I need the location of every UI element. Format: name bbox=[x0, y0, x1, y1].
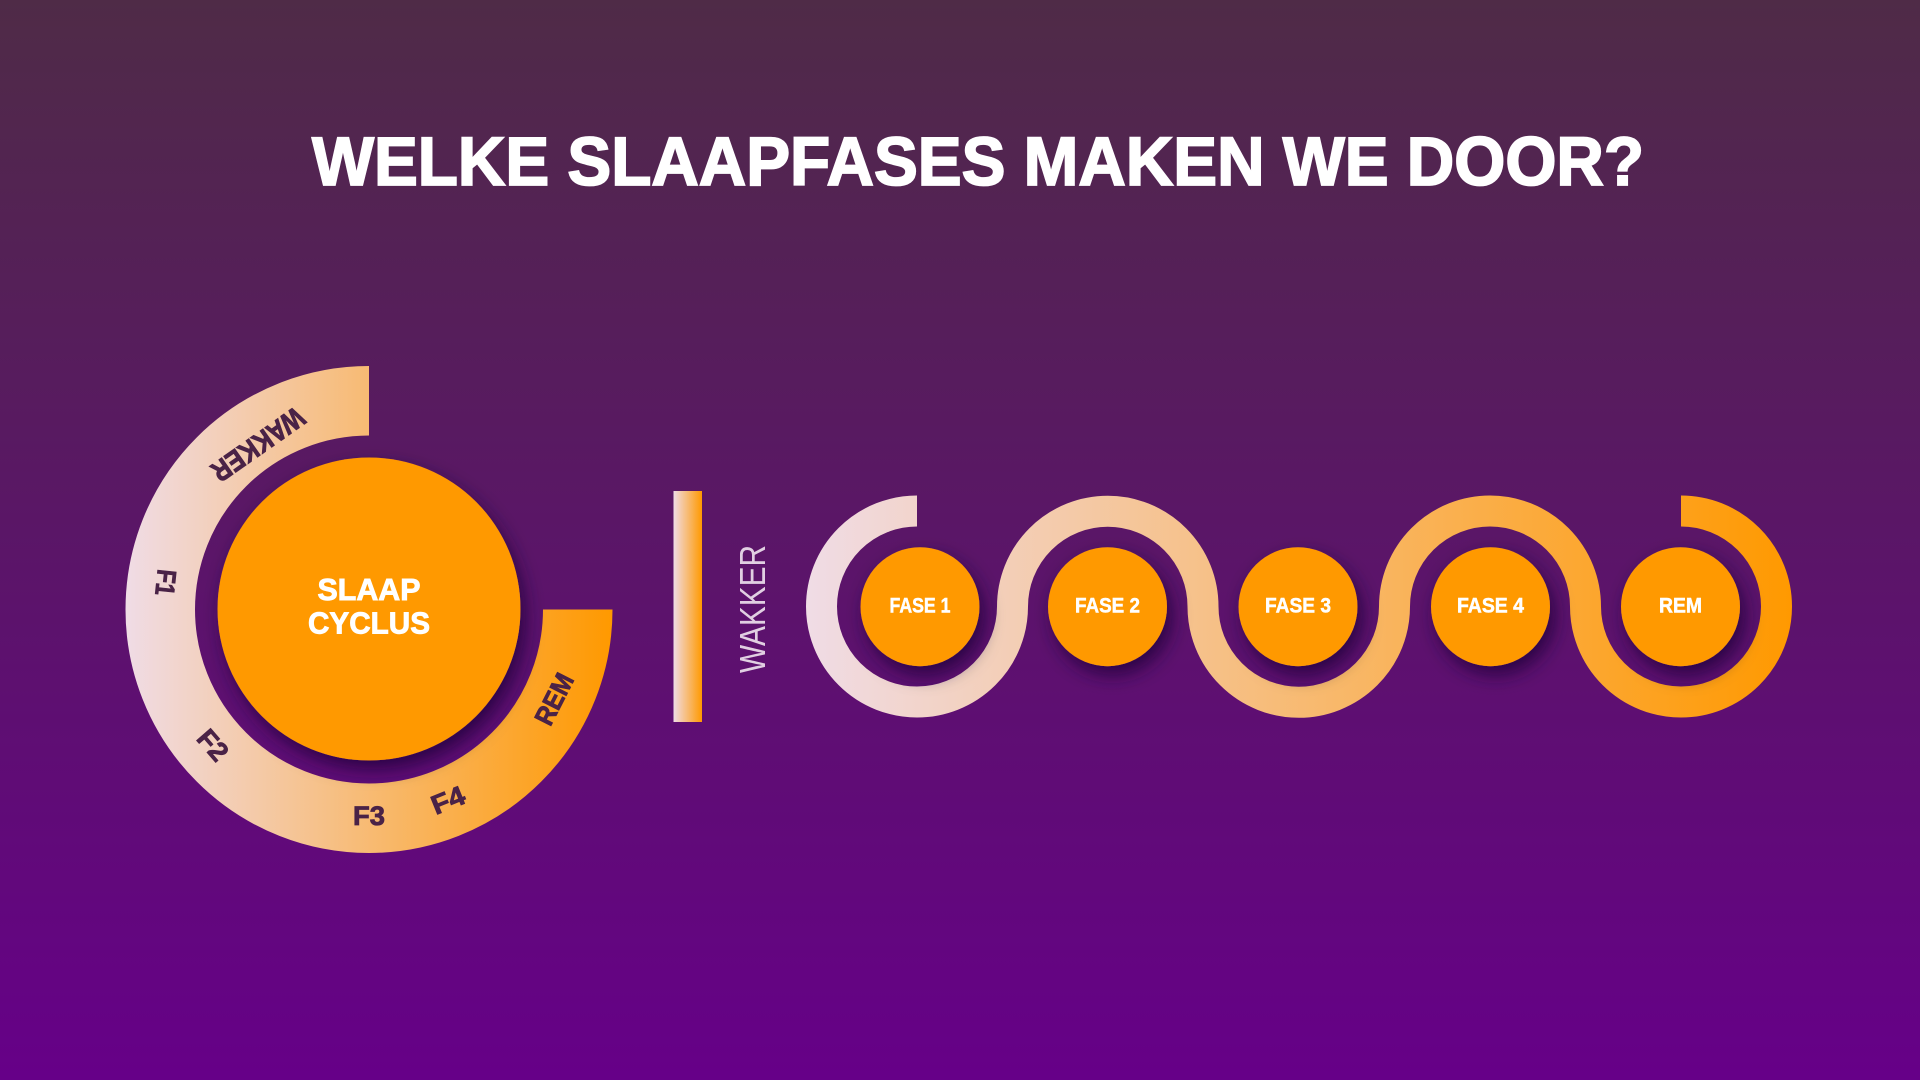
center circle: slaap cyclus bbox=[218, 458, 520, 760]
label: wakker on ring: WAKKER bbox=[205, 400, 310, 487]
phase: fase 1 bbox=[860, 547, 980, 666]
vertical label: wakker: WAKKER bbox=[732, 545, 773, 673]
phase: fase 3 bbox=[1238, 547, 1358, 666]
phase: fase 1: FASE 1 bbox=[890, 594, 951, 618]
serpentine sleep phase path bbox=[822, 511, 1776, 702]
phase: rem bbox=[1621, 547, 1740, 666]
center circle: slaap cyclus: CYCLUS bbox=[308, 606, 430, 640]
ring arc bbox=[160, 401, 578, 818]
phase: rem: REM bbox=[1659, 594, 1702, 618]
label: REM on ring: REM bbox=[529, 668, 580, 730]
phase: fase 4: FASE 4 bbox=[1457, 594, 1524, 618]
phase: fase 4 bbox=[1431, 547, 1550, 666]
label: F1: F1 bbox=[149, 568, 182, 597]
legend bar bbox=[674, 491, 702, 722]
phase: fase 2 bbox=[1048, 547, 1167, 666]
phase: fase 2: FASE 2 bbox=[1075, 594, 1140, 618]
phase: fase 3: FASE 3 bbox=[1265, 594, 1331, 618]
label: F3: F3 bbox=[353, 801, 385, 831]
center circle: slaap cyclus: SLAAP bbox=[318, 572, 420, 607]
label: F4: F4 bbox=[427, 780, 470, 821]
label: F2: F2 bbox=[191, 723, 234, 767]
panel: sleep cycle ring bbox=[149, 400, 580, 831]
title: WELKE SLAAPFASES MAKEN WE DOOR? bbox=[312, 123, 1644, 200]
